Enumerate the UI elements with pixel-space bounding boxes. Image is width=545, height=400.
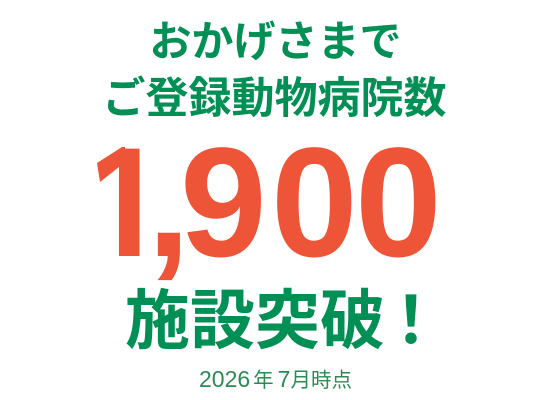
- heading: line two: ご登録動物病院数: [102, 64, 446, 126]
- date note: 2026年7月時点: [199, 363, 352, 393]
- heading: facilities exceeded: 施設突破: [125, 268, 385, 362]
- big number: [97, 147, 436, 280]
- exclamation mark: ！: [378, 268, 444, 362]
- big number: 1: [82, 116, 169, 290]
- heading: line one: おかげさまで: [149, 8, 402, 69]
- big number: ,900: [147, 116, 442, 290]
